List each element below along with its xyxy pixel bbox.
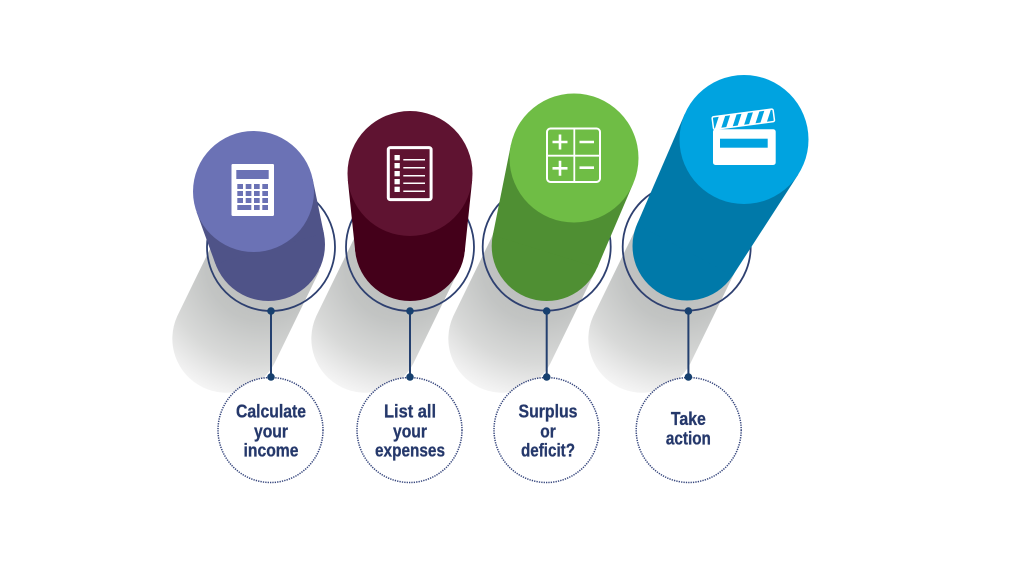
cylinder 1 top: [193, 131, 314, 252]
icon: clapperboard: [712, 109, 776, 165]
label circle 2: expenses: [375, 441, 445, 461]
connector 2: [406, 307, 414, 377]
label circle 1: Calculate: [236, 402, 306, 422]
shadow 2: [311, 223, 458, 393]
label circle 2: List all: [384, 402, 436, 422]
ring 4: [623, 183, 751, 311]
shadow 4: [588, 223, 736, 393]
label circle 3: Surplus: [518, 402, 578, 422]
ring 1: [207, 183, 335, 311]
label circle 1: your: [254, 422, 288, 442]
step 4: take action: [588, 75, 808, 482]
cylinder 3 side: [492, 145, 633, 301]
step 3: surplus or deficit: [448, 94, 638, 482]
cylinder 1 side: [197, 179, 325, 301]
icon: calculator: [232, 164, 274, 216]
step 2: list all your expenses: [311, 111, 474, 482]
ring 3: [483, 183, 611, 311]
label circle 3: [494, 373, 599, 482]
label circle 1: income: [244, 441, 298, 461]
connector 1: [267, 307, 275, 377]
shadow 1: [172, 223, 320, 393]
ring 2: [346, 183, 474, 311]
cylinder 4 top: [680, 75, 808, 204]
cylinder 2 side: [348, 180, 472, 301]
connector 4: [685, 307, 692, 377]
cylinder 4 side: [632, 114, 798, 301]
icon: plus and minus grid: [547, 128, 600, 182]
label circle 1: [218, 373, 323, 482]
icon: checklist: [388, 148, 431, 200]
cylinder 2 top: [348, 111, 472, 236]
label circle 2: [357, 373, 462, 482]
label circle 4: action: [666, 429, 711, 449]
label circle 4: Take: [671, 409, 706, 429]
label circle 2: your: [393, 422, 427, 442]
label circle 4: [636, 373, 741, 482]
connector 3: [543, 307, 550, 377]
shadow 3: [448, 223, 596, 393]
label circle 3: deficit?: [521, 441, 575, 461]
label circle 3: or: [540, 422, 556, 442]
step 1: calculate your income: [172, 131, 335, 482]
cylinder 3 top: [510, 94, 638, 222]
